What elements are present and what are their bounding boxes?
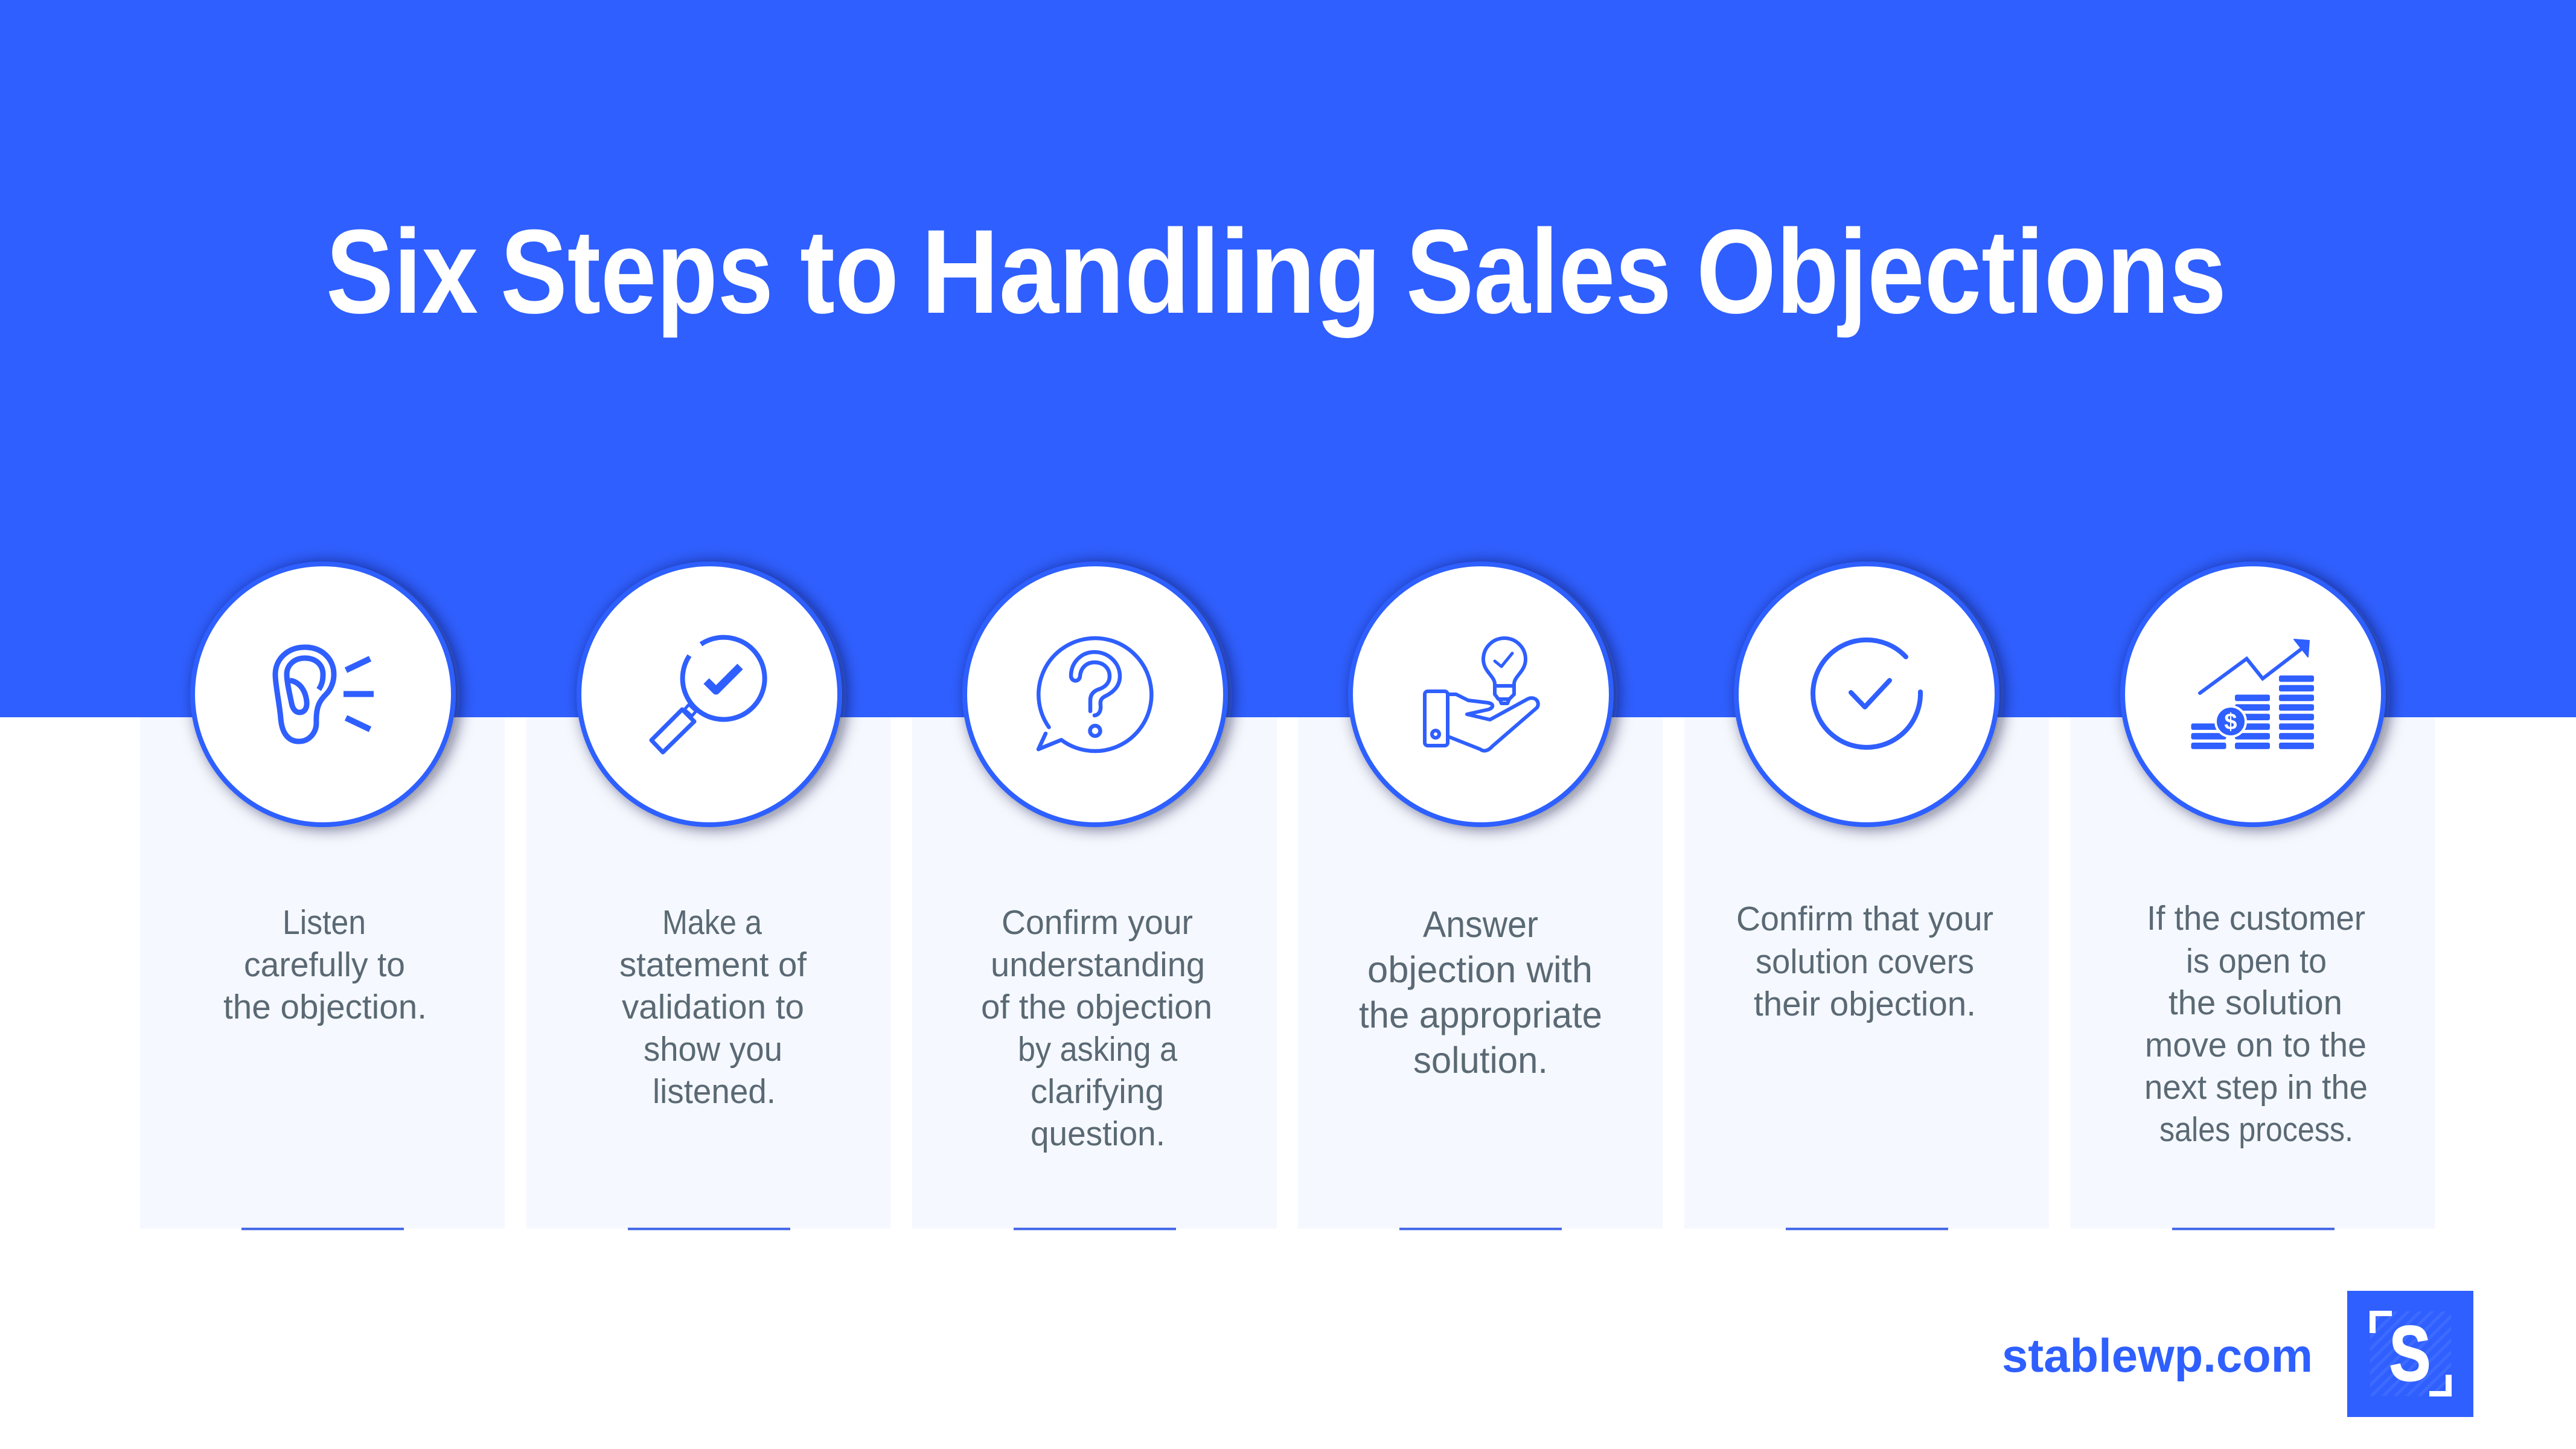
card accent bar bbox=[241, 1228, 404, 1230]
title: Objections bbox=[1696, 205, 2226, 338]
title bbox=[326, 205, 2226, 338]
step text: is open to bbox=[2186, 942, 2327, 980]
card background bbox=[912, 717, 1277, 1229]
step text bbox=[2144, 899, 2368, 1149]
icon circle bbox=[1736, 564, 1997, 825]
step text: of the objection bbox=[981, 988, 1212, 1026]
step text: solution covers bbox=[1756, 942, 1974, 981]
card background bbox=[1298, 717, 1663, 1229]
card accent bar bbox=[1014, 1228, 1176, 1230]
icon circle bbox=[2123, 564, 2383, 825]
icon: growth chart with coins: $ bbox=[2224, 709, 2237, 735]
icon: ear bbox=[275, 647, 374, 741]
panel: step 1 listen bbox=[140, 564, 505, 1230]
step text: the objection. bbox=[223, 988, 427, 1026]
title: Handling bbox=[921, 205, 1381, 338]
panel: step 6 move on bbox=[2071, 564, 2435, 1230]
step text: sales process. bbox=[2159, 1110, 2353, 1149]
step text: Confirm your bbox=[1002, 903, 1193, 942]
icon circle bbox=[579, 564, 840, 825]
step text: next step in the bbox=[2144, 1068, 2368, 1107]
card background bbox=[2071, 717, 2435, 1229]
logo: S bbox=[2389, 1311, 2431, 1397]
step text: If the customer bbox=[2147, 899, 2365, 938]
title: Sales bbox=[1406, 205, 1672, 338]
step text: question. bbox=[1031, 1115, 1165, 1153]
step text: Confirm that your bbox=[1736, 900, 1993, 938]
icon circle bbox=[193, 564, 453, 825]
step text bbox=[1736, 900, 1993, 1023]
card background bbox=[526, 717, 891, 1229]
card accent bar bbox=[1399, 1228, 1562, 1230]
icon: magnifier with check bbox=[651, 638, 765, 752]
step text: by asking a bbox=[1018, 1030, 1177, 1069]
step text: Make a bbox=[662, 903, 762, 942]
step text: move on to the bbox=[2145, 1026, 2367, 1064]
panel: step 5 confirm solution bbox=[1684, 564, 2049, 1230]
card background bbox=[1684, 717, 2049, 1229]
icon circle bbox=[1350, 564, 1611, 825]
blue header band bbox=[0, 0, 2576, 717]
step text: show you bbox=[644, 1030, 782, 1069]
card accent bar bbox=[2172, 1228, 2335, 1230]
icon: growth chart with coins bbox=[2191, 639, 2314, 749]
title: Six bbox=[326, 205, 478, 338]
footer website text: stablewp.com bbox=[2002, 1329, 2313, 1382]
title: to bbox=[800, 205, 899, 338]
step text: clarifying bbox=[1031, 1072, 1164, 1111]
icon: circled check bbox=[1813, 640, 1920, 747]
step text bbox=[981, 903, 1212, 1153]
card background bbox=[140, 717, 505, 1229]
title: Steps bbox=[500, 205, 773, 338]
step text: solution. bbox=[1413, 1040, 1548, 1081]
step text: objection with bbox=[1367, 949, 1593, 990]
step text: understanding bbox=[991, 945, 1205, 984]
step text: Answer bbox=[1423, 904, 1538, 945]
step text: listened. bbox=[653, 1072, 776, 1111]
step text: carefully to bbox=[244, 945, 405, 984]
panel: step 2 validate bbox=[526, 564, 891, 1230]
step text bbox=[223, 903, 427, 1026]
step text: their objection. bbox=[1754, 985, 1976, 1023]
icon: hand holding light bulb bbox=[1425, 638, 1538, 750]
card accent bar bbox=[628, 1228, 790, 1230]
step text: the solution bbox=[2169, 984, 2342, 1022]
logo bbox=[2347, 1291, 2473, 1417]
step text: the appropriate bbox=[1359, 994, 1602, 1035]
step text bbox=[1359, 904, 1602, 1081]
icon: question speech bubble bbox=[1038, 638, 1151, 751]
panel: step 4 answer bbox=[1298, 564, 1663, 1230]
step text: validation to bbox=[622, 988, 804, 1026]
step text bbox=[619, 903, 807, 1111]
step text: statement of bbox=[619, 945, 807, 984]
panel: step 3 confirm understanding bbox=[912, 564, 1277, 1230]
step text: Listen bbox=[283, 903, 366, 942]
icon circle bbox=[965, 564, 1226, 825]
card accent bar bbox=[1786, 1228, 1948, 1230]
